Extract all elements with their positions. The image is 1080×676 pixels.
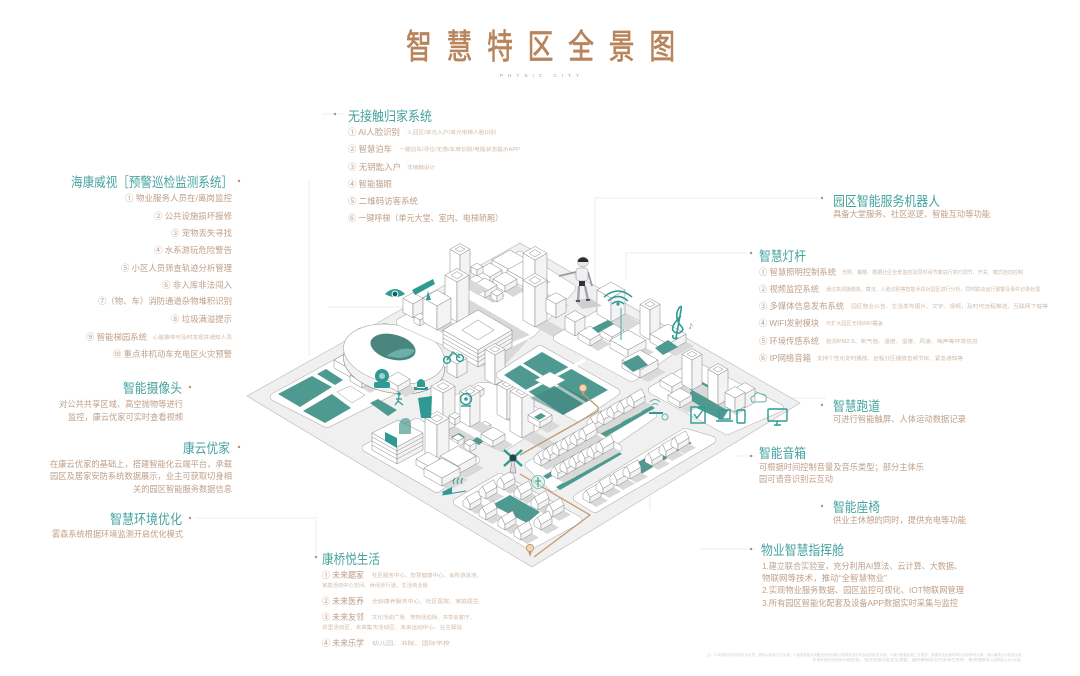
block: houses north — [587, 389, 655, 446]
panel: property command cabin: 2.实现物业服务数据、园区监控可视化、IOT物联网管理 — [762, 584, 964, 595]
robot — [559, 257, 602, 309]
block: south houses with green — [457, 471, 578, 546]
icon: bike — [444, 352, 463, 363]
panel: contactless home system — [334, 108, 521, 223]
panel: smart running track — [821, 399, 966, 424]
panel: smart lamp post — [750, 249, 1048, 363]
heading: 智能摄像头 — [123, 381, 182, 396]
footnote — [707, 652, 1025, 662]
list: 园区物业公告、生活发布图片、文字、视频，及时可远程推送、互联网下载等 — [851, 303, 1048, 310]
list: ③ 无钥匙入户 — [348, 161, 401, 172]
list: ⑧ 垃圾满溢提示 — [171, 313, 232, 324]
panel: Kangyun home: 园区及居家安防系统数据展示，业主可获取切身相 — [50, 470, 232, 481]
panel: smart speaker: 园可语音识别云互动 — [759, 473, 833, 484]
list: 全龄康养服务中心、社区医院、家庭医生 — [372, 598, 479, 605]
icon: windmill — [504, 450, 522, 473]
panel: smart camera: 对公共共享区域、高空抛物等进行 — [59, 398, 183, 409]
icon: music note: ♪ — [688, 320, 694, 332]
panel: smart environment — [52, 512, 191, 539]
heading: 智慧跑道 — [833, 399, 880, 414]
pin: route start — [579, 384, 587, 396]
icon: clipboard — [691, 407, 705, 423]
list: ⑨ 智能梯园系统 — [86, 331, 147, 342]
block: right towers — [652, 349, 780, 431]
panel: smart camera: 监控，康云优家可实时查看视频 — [68, 411, 183, 422]
panel: Kangyun home: 关的园区智能服务数据信息 — [133, 483, 232, 494]
striped building — [443, 310, 530, 367]
icon: surveillance camera — [412, 279, 435, 300]
list: ⑥ 非入库非法闯入 — [162, 279, 232, 290]
panel: smart camera — [59, 381, 191, 422]
list — [348, 126, 521, 223]
icon: recycling bin — [418, 396, 432, 418]
list: ② 公共设施损坏报修 — [154, 210, 232, 221]
heading: 园区智能服务机器人 — [833, 194, 940, 209]
icon: eye — [385, 289, 405, 297]
icon: mist bench — [442, 478, 466, 495]
list: ① 智慧照明控制系统 — [759, 266, 836, 277]
stadium — [334, 317, 449, 401]
list: ③ 未来友邻 — [322, 611, 364, 622]
list: ⑤ 小区人员筛查轨迹分析管理 — [121, 262, 232, 273]
icon: cloud — [751, 393, 766, 402]
icon: runner ring — [532, 476, 544, 488]
icon: phone — [737, 410, 745, 423]
list: ① 物业服务人员在/离岗监控 — [125, 192, 232, 203]
heading: 智慧灯杆 — [759, 249, 806, 264]
list: ④ 智能猫眼 — [348, 178, 392, 189]
list: 文化活动广场、宠物活动场、共享会客厅、 — [372, 614, 475, 621]
heading: 无接触归家系统 — [348, 108, 432, 124]
heading: 智能座椅 — [833, 500, 880, 515]
pin: route end — [526, 544, 534, 557]
list: 幼儿园、书院、国际学校 — [372, 640, 450, 647]
list: 心脏骤停可及时发现并通知人员 — [153, 334, 232, 341]
panel: smart seat — [821, 500, 966, 525]
panel: Kangyun home: 在康云优家的基础上，搭建智能化云端平台，承载 — [50, 458, 232, 469]
list: ④ 未来乐学 — [322, 637, 364, 648]
panel: service robot — [821, 194, 990, 219]
panel: smart seat: 供业主休憩的同时，提供充电等功能 — [833, 514, 966, 525]
panel: property command cabin: 3.所有园区智能化配套及设备APP数据实时采集与监控 — [762, 597, 958, 608]
list: 光照、策略、根据社区全景监控及同时间节奏进行亮灯调节、开关、模式自动控制 — [842, 269, 1023, 276]
icon: laptop — [716, 410, 733, 421]
list: 一键泊车/寻位/无感/车牌识别/电瓶状态提示APP — [399, 146, 521, 153]
block: central lawn with pin — [500, 349, 616, 418]
block: houses east — [577, 431, 712, 509]
list: 非接触设计 — [407, 164, 435, 171]
leader lines — [195, 114, 826, 553]
block: top left buildings — [400, 244, 572, 367]
heading: 海康威视［预警巡检监测系统］ — [71, 174, 233, 190]
isometric smart city map — [247, 243, 800, 567]
icon: monitor — [768, 409, 787, 425]
footnote: 注：1.本资料所示内容仅为示意，具体以实际交付为准；2.相关智能化设备及系统功能以政府批准文件及合同约定为准；3.部分配套由第三方提供，其建设及运营时间以实际情况为准，请以最终公示信息为准。 — [707, 652, 1025, 657]
list: ① 未来踞家 — [322, 569, 364, 580]
block: teaching building — [366, 411, 484, 490]
list: ⑥ 一键呼梯（单元大堂、室内、电梯轿厢） — [348, 212, 503, 223]
panel: property command cabin: 1.建立联合实验室，充分利用AI算法、云计算、大数据、 — [762, 560, 962, 571]
icon: treble clef — [673, 306, 683, 339]
list: 通过高清摄像机、算法、人脸识别等智能手段对园区进行分析，同时联动运行报警及事件记录处理 — [826, 286, 1040, 293]
heading: 康云优家 — [183, 440, 230, 456]
panel: service robot: 具备大堂服务、社区巡逻、智能互动等功能 — [833, 208, 990, 219]
list: ① AI人脸识别 — [348, 126, 400, 137]
panel: smart running track: 可进行智能触屏、人体运动数据记录 — [833, 413, 966, 424]
panel: Hikvision warning system — [71, 174, 240, 359]
list: ② 未来医养 — [322, 595, 364, 606]
panel: smart speaker: 可根据时间控制音量及音乐类型；部分主体乐 — [759, 461, 924, 472]
block: upper right with wifi pole — [557, 282, 694, 382]
title: PHYSIC CITY — [500, 73, 579, 78]
list: ⑤ 二维码访客系统 — [348, 195, 418, 206]
icon: dome camera — [374, 369, 390, 388]
list: ③ 宠物丢失寻找 — [171, 227, 232, 238]
icon: siren — [414, 379, 428, 390]
list — [759, 266, 1048, 363]
panel: Kangqiao Yue life — [315, 551, 482, 648]
list: ④ 水系游玩危险警告 — [154, 244, 232, 255]
list: 可扩大园区无线WIFI覆盖 — [826, 320, 883, 327]
list: 入园区/单元入户/单元电梯人脸识别 — [407, 129, 496, 136]
list: ⑤ 环境传感系统 — [759, 335, 819, 346]
block: houses middle — [529, 422, 622, 490]
route path — [520, 394, 598, 557]
list: ⑥ IP网络音箱 — [759, 352, 811, 363]
panel: smart environment: 雾森系统根据环境监测开启优化模式 — [52, 528, 183, 539]
list: ④ WIFI发射模块 — [759, 317, 819, 328]
footnote: 本资料制作时间为现阶段，相关信息可能发生调整，最终解释权归开发单位所有，敬请理解并以现场公示为准。 — [812, 657, 1025, 662]
icon: small wifi lamp — [649, 400, 668, 420]
list: 检测PM2.5、氧气值、温度、湿度、风速、噪声等环境信息 — [826, 338, 978, 345]
block: stadium and sports fields — [274, 317, 449, 424]
icon: walking person — [395, 392, 403, 405]
heading: 康桥悦生活 — [322, 551, 380, 567]
icon: round camera — [460, 394, 472, 406]
list: ② 智慧泊车 — [348, 143, 392, 154]
panel: smart speaker — [750, 445, 924, 484]
list: ⑩ 重点非机动车充电区火灾预警 — [113, 348, 232, 359]
list: ③ 多媒体信息发布系统 — [759, 300, 844, 311]
list: ⑦（物、车）消防通道杂物堆积识别 — [98, 295, 232, 306]
list: 家庭活动中心空间、休闲步行道、生活商业街 — [322, 582, 428, 589]
panel: property command cabin: 物联网等技术，推动“全智慧物业” — [762, 572, 887, 583]
list: 邻里活动区、未来集市活动区、未来运动中心、业主驿站 — [322, 624, 462, 631]
heading: 物业智慧指挥舱 — [761, 543, 844, 558]
list: 社区服务中心、智慧健康中心、会所游泳池、 — [372, 572, 482, 579]
title: 智慧特区全景图 — [406, 28, 690, 66]
ground plate — [247, 243, 800, 567]
list: ② 视频监控系统 — [759, 283, 819, 294]
panel: Kangyun home — [50, 440, 240, 494]
list — [322, 569, 482, 648]
icon: wifi and lamp pole — [604, 291, 632, 340]
list — [86, 192, 232, 359]
block: central towers — [427, 344, 560, 452]
heading: 智慧环境优化 — [110, 512, 182, 527]
panel: property command cabin — [750, 543, 964, 608]
heading: 智能音箱 — [759, 445, 806, 461]
list: 支持个性化定时播放、远程分区播放音频节目、紧急通知等 — [817, 355, 963, 362]
